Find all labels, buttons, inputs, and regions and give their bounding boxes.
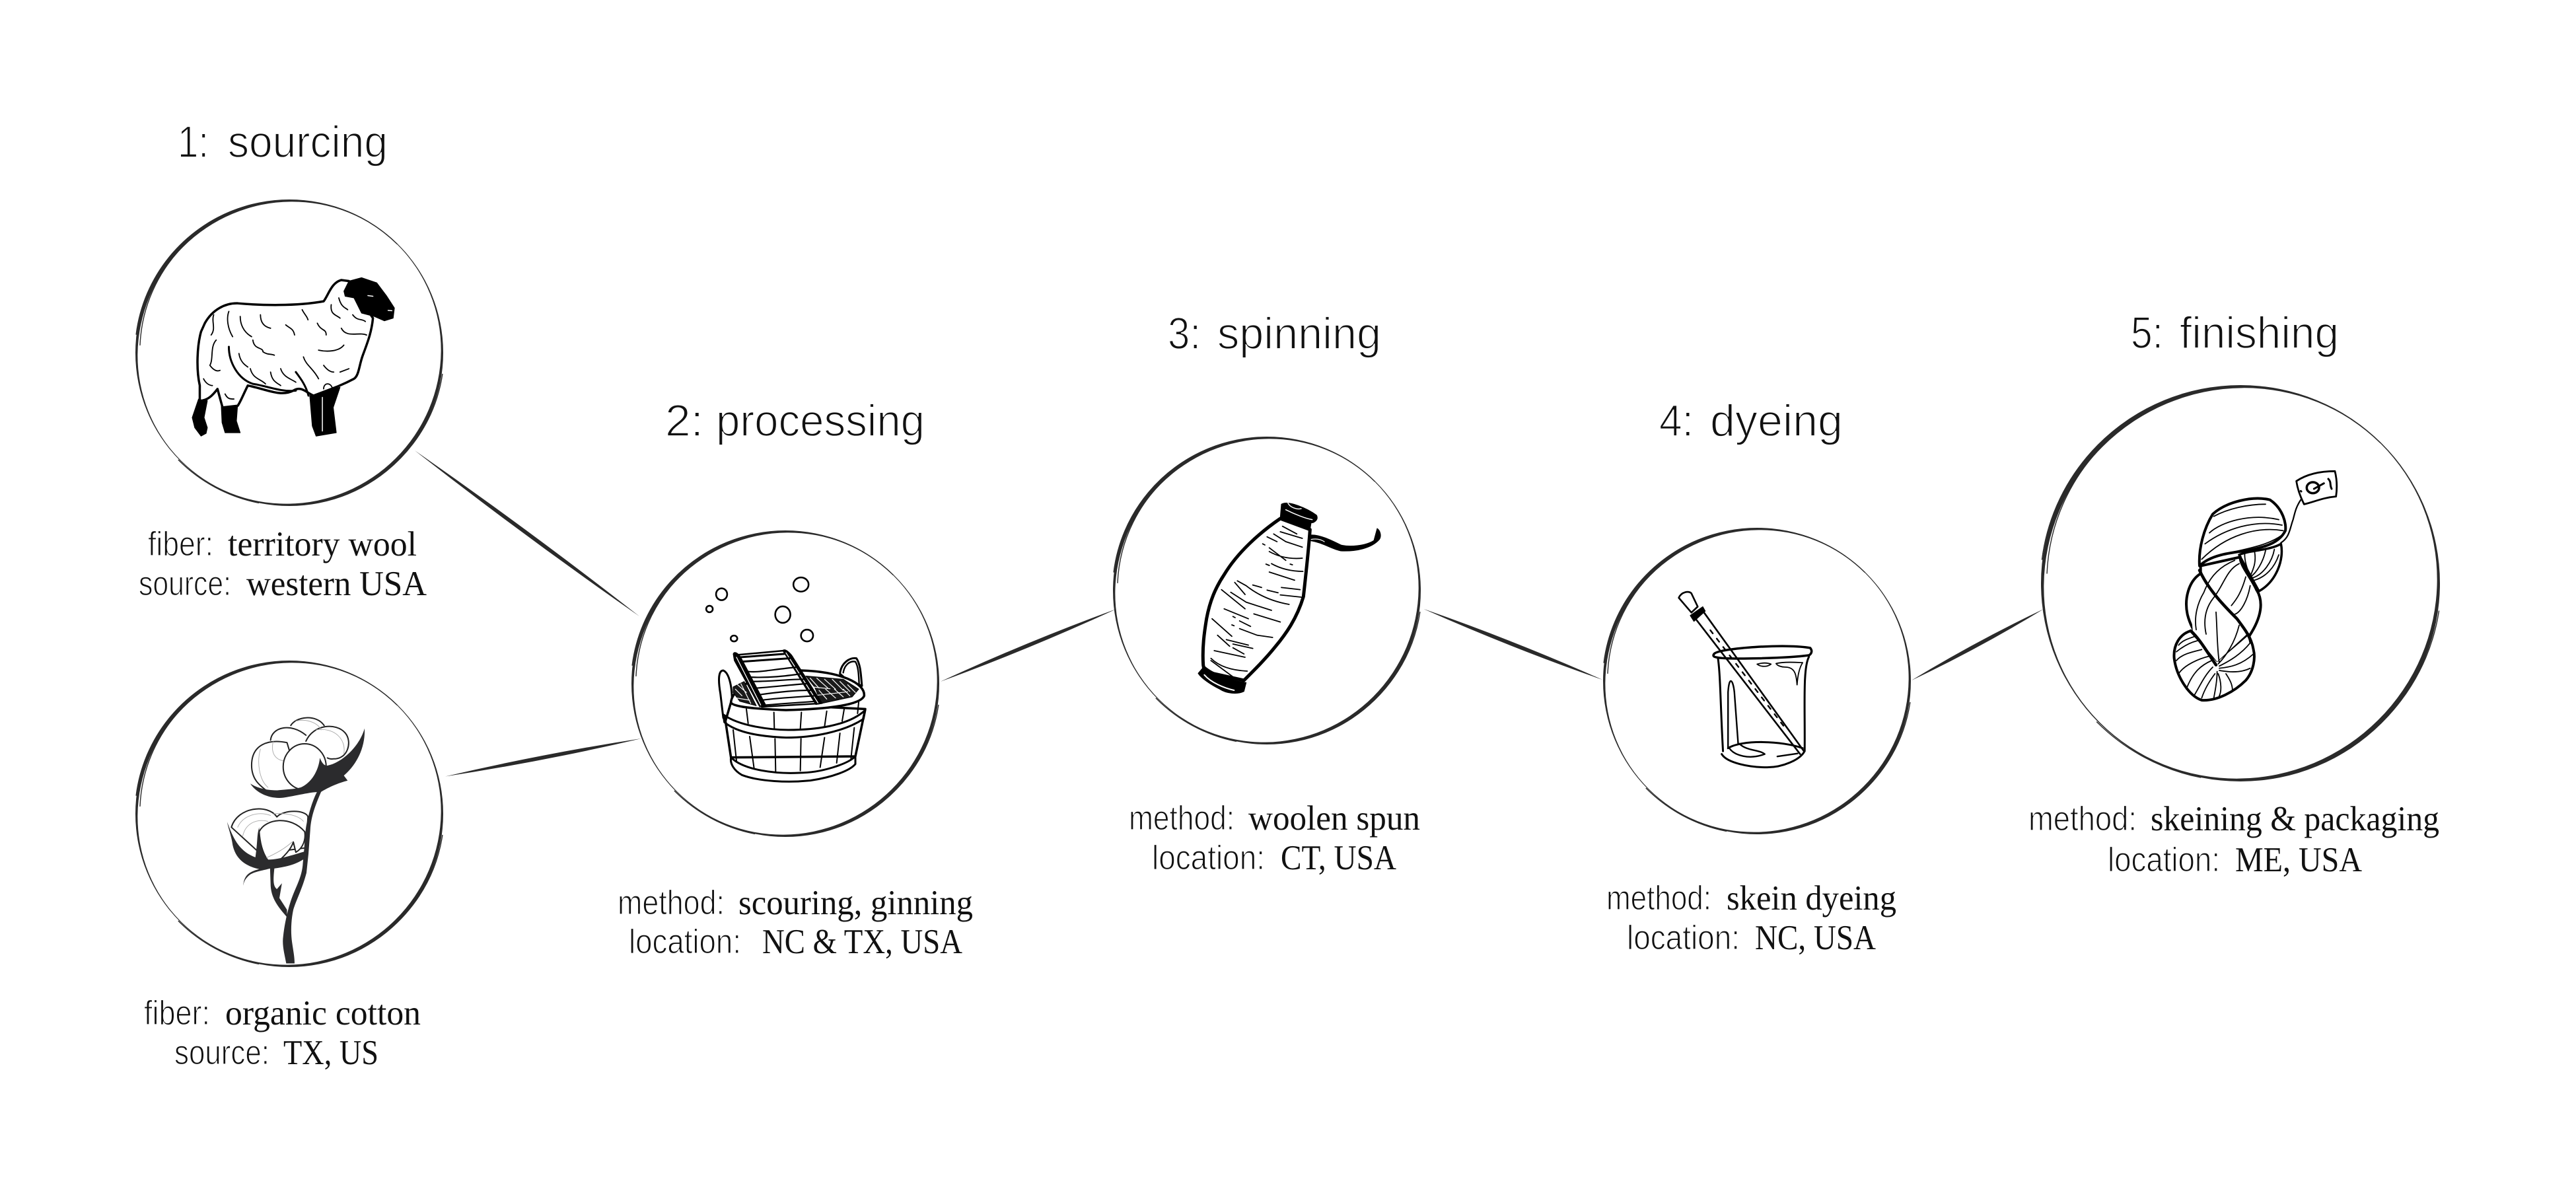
connector: processing to spinning — [941, 609, 1116, 682]
heading: 2 processing: 2: — [665, 396, 703, 446]
panel: step 1 sourcing, wool — [135, 117, 443, 603]
heading: 5 finishing: 5: — [2131, 308, 2163, 358]
text: fiber and source: source: — [174, 1034, 269, 1072]
connector: dyeing to finishing — [1912, 609, 2044, 680]
heading: 2 processing: processing — [716, 396, 925, 446]
text: method and location — [2028, 800, 2439, 879]
text: fiber and source: organic cotton — [225, 994, 421, 1032]
icon: washtub — [719, 650, 865, 781]
icon: yarn cone — [1198, 503, 1380, 694]
text: method and location: NC & TX, USA — [762, 923, 962, 961]
panel: step 3 spinning — [1113, 308, 1421, 877]
heading: 3 spinning: spinning — [1217, 308, 1381, 359]
circle: dyeing — [1603, 528, 1911, 834]
text: method and location: location: — [629, 923, 741, 961]
circle: finishing — [2041, 385, 2440, 781]
heading: 5 finishing: finishing — [2180, 308, 2339, 358]
text: method and location: scouring, ginning — [738, 884, 973, 922]
text: method and location: skein dyeing — [1727, 879, 1896, 918]
circle: spinning — [1113, 437, 1421, 744]
panel: step 5 finishing — [2028, 308, 2440, 879]
text: method and location: location: — [1152, 839, 1265, 877]
circle: cotton — [135, 661, 443, 967]
connector: spinning to dyeing — [1424, 609, 1602, 680]
text: fiber and source: western USA — [246, 565, 427, 603]
text: method and location: ME, USA — [2235, 841, 2362, 879]
connector: wool to processing — [415, 450, 639, 616]
heading: 3 spinning: 3: — [1168, 308, 1201, 359]
heading: 1 sourcing: 1: — [178, 117, 209, 167]
icon: beaker with thermometer — [1679, 592, 1812, 768]
text: method and location: method: — [1129, 799, 1234, 838]
text: fiber and source: territory wool — [228, 525, 417, 563]
text: fiber and source: TX, US — [283, 1034, 378, 1072]
icon: yarn skein with tag — [2174, 471, 2337, 700]
text: method and location — [1606, 879, 1896, 957]
circle: processing — [631, 530, 939, 837]
text: method and location: skeining & packaging — [2151, 800, 2439, 838]
text: method and location — [1129, 799, 1420, 877]
text: method and location: location: — [1627, 919, 1740, 957]
panel: step 4 dyeing — [1603, 396, 1911, 957]
text: method and location: method: — [2028, 800, 2137, 838]
text: fiber and source: fiber: — [148, 525, 213, 563]
icon: cotton plant — [227, 718, 365, 964]
text: fiber and source — [139, 525, 427, 603]
heading: 1 sourcing: sourcing — [228, 117, 388, 167]
text: method and location: method: — [1606, 879, 1711, 918]
text: method and location: woolen spun — [1248, 799, 1420, 838]
heading: 4 dyeing: 4: — [1659, 396, 1694, 446]
text: method and location — [618, 884, 973, 961]
icon: washtub with bubbles — [706, 577, 813, 641]
text: method and location: method: — [618, 884, 725, 922]
text: method and location: NC, USA — [1755, 919, 1876, 957]
panel: step 1 sourcing, cotton — [135, 661, 443, 1072]
circle: wool — [135, 199, 443, 506]
text: fiber and source — [144, 994, 421, 1072]
panel: step 2 processing — [618, 396, 973, 961]
connector: cotton to processing — [445, 739, 641, 777]
icon: sheep — [192, 277, 394, 436]
heading: 4 dyeing: dyeing — [1710, 396, 1843, 446]
text: fiber and source: fiber: — [144, 994, 210, 1032]
text: method and location: location: — [2108, 841, 2220, 879]
text: method and location: CT, USA — [1281, 839, 1396, 877]
text: fiber and source: source: — [139, 565, 231, 603]
